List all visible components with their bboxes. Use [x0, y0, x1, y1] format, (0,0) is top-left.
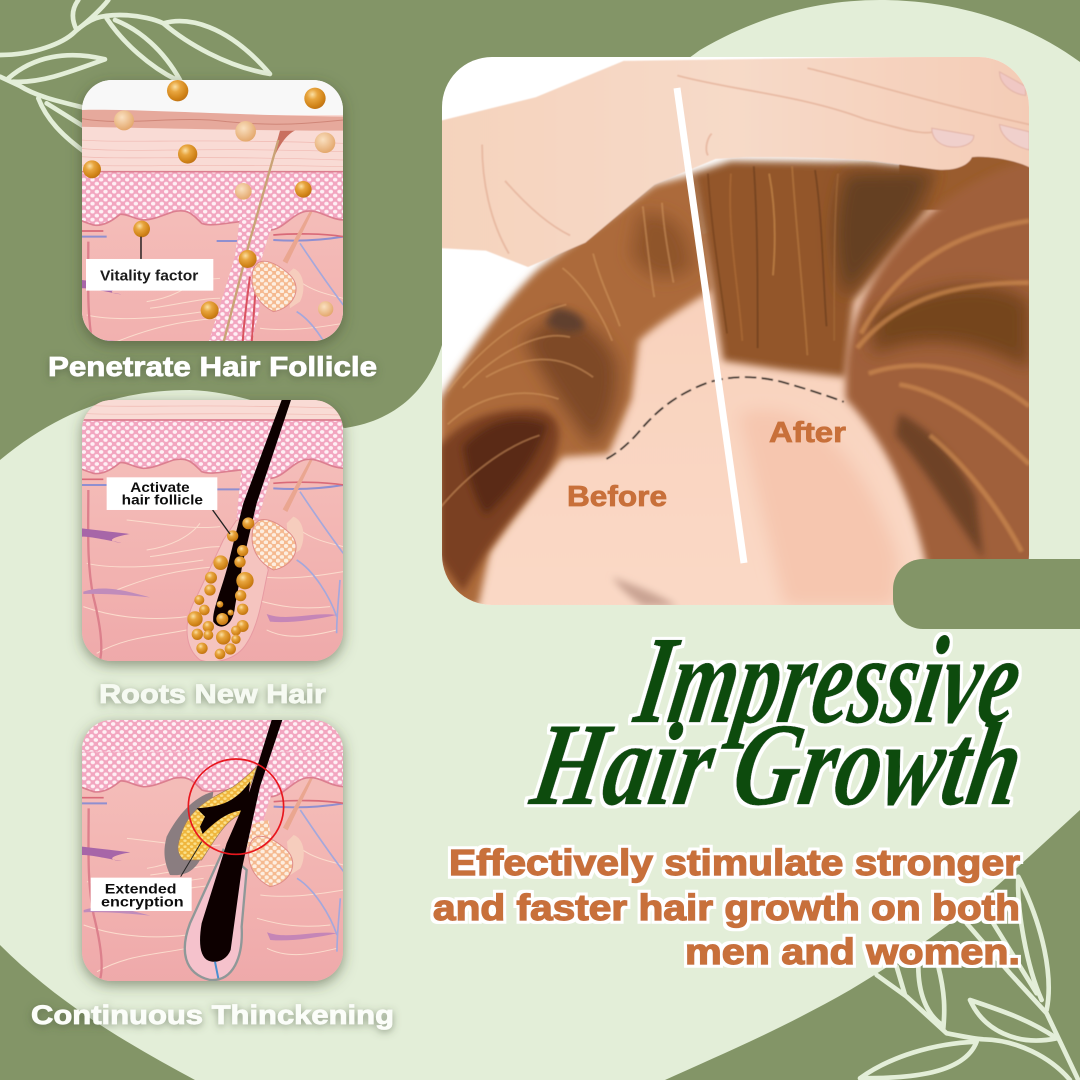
title [523, 612, 1033, 830]
label: extended encryption: Extended [105, 881, 176, 896]
decorative leaves: top left [0, 0, 270, 153]
yellow sheath [178, 766, 257, 860]
hand [440, 55, 1031, 267]
middle hair [693, 161, 938, 377]
faded nutrient spheres [114, 110, 335, 317]
left hair [440, 174, 712, 606]
gold nutrient spheres [83, 80, 326, 319]
grey outer sheath [164, 792, 213, 875]
label: activate hair follicle: hair follicle [122, 492, 203, 507]
label: activate hair follicle [107, 477, 217, 510]
caption: continuous thinckening: Continuous Thinckening [31, 1000, 394, 1030]
decorative leaves: bottom right [860, 877, 1078, 1080]
follicle sheath [185, 850, 247, 980]
label: extended encryption [91, 878, 192, 911]
black hair [213, 400, 291, 627]
label: vitality factor: Vitality factor [100, 269, 199, 285]
nails [932, 128, 974, 147]
underlay hair behind fingers [898, 156, 1027, 210]
dashed hairline [606, 377, 844, 459]
label: before: Before [567, 481, 667, 513]
description text: and faster hair growth on both [433, 887, 1020, 928]
label: extended encryption: encryption [101, 895, 184, 910]
right hair [840, 164, 1029, 559]
forehead skin [442, 210, 940, 605]
caption: penetrate hair follicle: Penetrate Hair Follicle [48, 351, 377, 382]
panel: penetrate hair follicle [72, 74, 349, 351]
gold spheres [187, 517, 254, 659]
before and after photo [440, 55, 1037, 610]
caption: roots new hair: Roots New Hair [99, 679, 327, 709]
follicle sheath [208, 217, 273, 343]
green pill tab [893, 559, 1080, 629]
label: vitality factor [86, 259, 213, 291]
panel: roots new hair [72, 394, 353, 675]
label: activate hair follicle: Activate [130, 480, 190, 495]
description text: men and women. [685, 931, 1020, 972]
panel: continuous thickening [72, 714, 353, 995]
white divider line [677, 88, 744, 563]
label: after: After [769, 417, 846, 449]
description text [433, 842, 1020, 972]
red circle [188, 759, 284, 854]
black hair [200, 720, 282, 962]
follicle sheath [187, 520, 268, 662]
description text: Effectively stimulate stronger [449, 842, 1020, 883]
